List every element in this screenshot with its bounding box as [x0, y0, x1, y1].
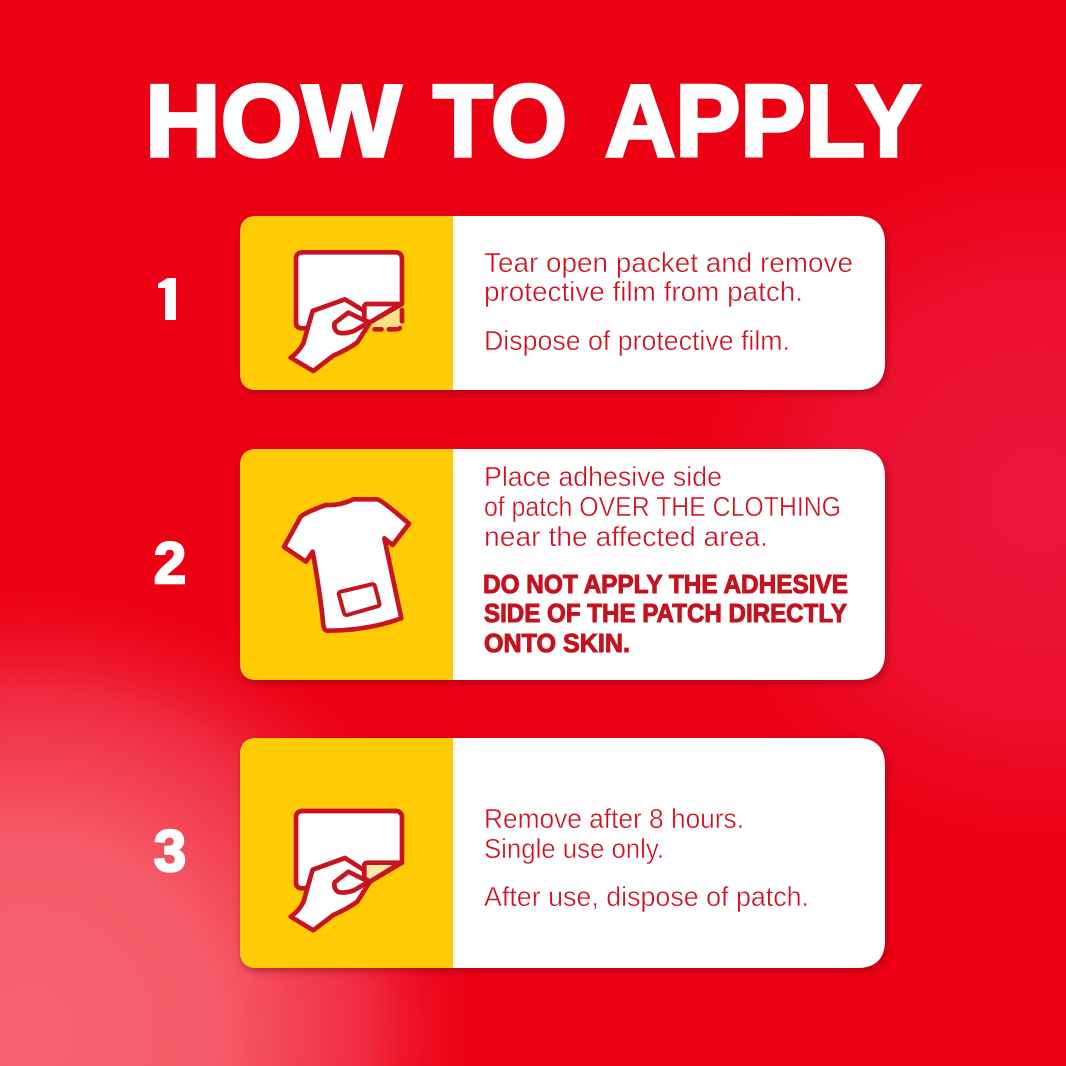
step 2 text: near the affected area.	[484, 521, 768, 552]
title: HOW	[145, 64, 402, 178]
title: APPLY	[605, 64, 921, 178]
title: TO	[433, 64, 567, 178]
icon: t-shirt with patch	[284, 499, 409, 631]
icon: hand peeling film from patch	[291, 252, 402, 371]
step 3 yellow panel	[240, 738, 453, 968]
step 2 card	[240, 449, 885, 680]
step 2 text: Place adhesive side	[484, 461, 722, 492]
step 3 text	[484, 803, 809, 912]
step 1 card	[240, 216, 885, 390]
step 1 number: 1	[155, 270, 187, 335]
step 2 text: DO NOT APPLY THE ADHESIVE	[483, 569, 848, 599]
step 3 card	[240, 738, 885, 968]
step 1 text: Tear open packet and remove	[484, 247, 853, 278]
step 2 text: of patch OVER THE CLOTHING	[484, 491, 841, 522]
step 3 text: Remove after 8 hours.	[484, 803, 744, 834]
step 1 text: protective film from patch.	[484, 276, 803, 307]
step 2 text: ONTO SKIN.	[484, 628, 630, 658]
step 1 text	[484, 247, 853, 356]
step 1 yellow panel	[240, 216, 453, 390]
step 3 text: Single use only.	[484, 833, 664, 864]
title	[145, 64, 921, 178]
step 2 yellow panel	[240, 449, 453, 680]
step 3 text: After use, dispose of patch.	[484, 881, 809, 912]
step 2 number: 2	[154, 531, 186, 596]
step 2 text	[483, 461, 848, 658]
step 3 number: 3	[154, 819, 186, 884]
icon: hand holding used patch	[291, 811, 402, 930]
step 1 text: Dispose of protective film.	[484, 325, 790, 356]
step 2 text: SIDE OF THE PATCH DIRECTLY	[484, 598, 847, 628]
